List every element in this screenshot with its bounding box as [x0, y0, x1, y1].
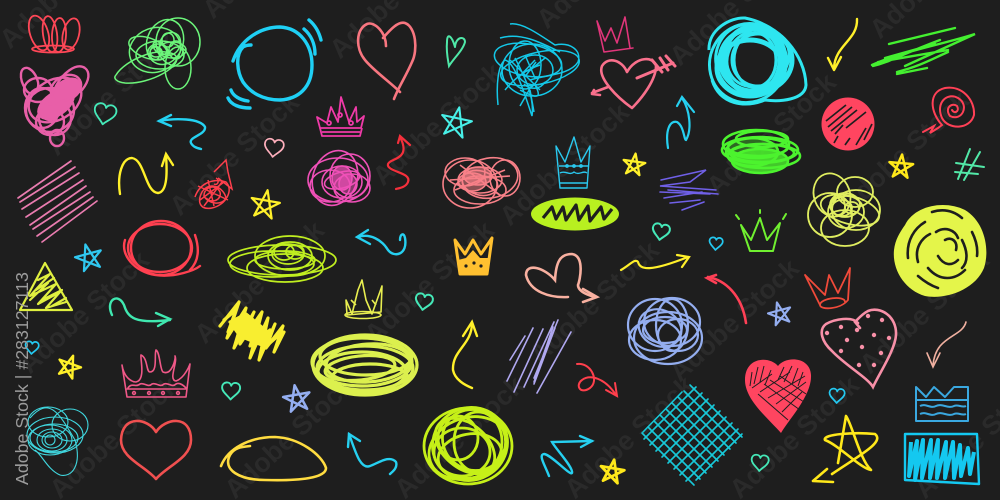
watermark pattern: Adobe Stock	[164, 86, 305, 221]
arrow: blue squiggle	[357, 230, 405, 254]
watermark pattern: Adobe Stock	[14, 244, 155, 379]
lines: lavender slashes	[507, 320, 571, 393]
scribble: cyan large	[695, 9, 806, 117]
arrow: yellow S	[119, 154, 173, 194]
heart: small teal	[92, 102, 118, 127]
crown: blue box	[916, 387, 968, 421]
arrow: yellow right	[621, 255, 689, 270]
side credit text: Adobe Stock | #283127113	[12, 272, 32, 485]
star: yellow small	[622, 152, 646, 176]
scribble: lime flat	[228, 236, 336, 282]
crown: yellow thin	[345, 280, 382, 318]
circle: red scribbled	[124, 221, 200, 276]
lines: purple hatch	[660, 170, 718, 210]
crown: orange	[455, 238, 492, 274]
arrow: blue bottom squiggle	[348, 434, 396, 474]
arrow: yellow down	[828, 19, 857, 70]
star: yellow small left	[55, 352, 84, 380]
scribble: yellow oval ring	[312, 335, 417, 395]
crown: pink outline	[597, 17, 633, 52]
blob: lime oval with zigzag	[531, 198, 619, 230]
heart: small mint center	[414, 293, 434, 311]
star: lavender	[281, 383, 312, 412]
heart: mint	[447, 36, 465, 66]
star: blue left	[73, 241, 105, 272]
watermark pattern: Adobe Stock	[189, 214, 330, 349]
heart: salmon outline	[358, 23, 415, 99]
crown: red loops	[25, 13, 83, 53]
arrow: red squiggle	[388, 136, 410, 189]
watermark pattern: Adobe Stock	[359, 214, 500, 349]
scribble: pink heart	[21, 66, 89, 146]
mesh: teal crosshatch	[642, 385, 742, 485]
arrow: red loop	[577, 364, 617, 396]
star: periwinkle right	[766, 299, 794, 326]
watermark pattern: Adobe Stock	[834, 84, 975, 219]
watermark pattern: Adobe Stock	[701, 66, 842, 201]
watermark pattern: Adobe Stock	[367, 56, 508, 191]
crown: lime	[736, 210, 786, 251]
hash: mint	[955, 149, 984, 180]
arrow: blue curved	[159, 115, 205, 149]
heart: small blue left	[25, 341, 39, 355]
crown: red-orange	[805, 268, 850, 308]
heart: red outline	[121, 421, 191, 479]
crown: magenta	[317, 97, 364, 136]
arrow: teal	[110, 298, 170, 326]
watermark pattern: Adobe Stock	[494, 96, 635, 231]
oval: yellow outline	[221, 437, 326, 480]
lines: pink hatch	[18, 161, 97, 242]
scribble: magenta	[305, 144, 370, 212]
heart: small mint lower	[221, 382, 240, 400]
scribble: blue tangled	[492, 24, 582, 116]
heart: small pale pink	[263, 138, 284, 158]
scribble: salmon	[443, 153, 521, 208]
arrow: blue up	[667, 97, 694, 148]
arrow: peach heart loop	[526, 254, 597, 302]
scribble: green	[115, 14, 200, 89]
scribble: yellow blob	[220, 302, 284, 360]
heart: small blue	[709, 237, 723, 251]
heart: pink dotted	[822, 310, 896, 387]
scribble: cyan thin	[27, 407, 88, 475]
scribble: yellow-green thin	[808, 168, 883, 246]
heart: small mint	[651, 223, 671, 241]
crown: pink scalloped	[122, 350, 190, 397]
watermark pattern: Adobe Stock	[524, 234, 665, 369]
watermark pattern: Adobe Stock	[664, 252, 805, 387]
arrow: red spiral	[923, 88, 974, 133]
crown: blue patterned	[556, 137, 590, 188]
circle: red filled	[822, 98, 874, 150]
star: big yellow with arrow	[813, 416, 877, 482]
arrow: red curve	[707, 275, 746, 323]
heart: red filled hatched	[745, 359, 811, 433]
arrow: blue zig	[542, 436, 592, 476]
arrow: yellow up	[453, 322, 477, 388]
scribble: red with flag	[195, 160, 232, 208]
star: yellow right	[888, 154, 914, 178]
scribble: yellow big	[894, 205, 986, 297]
watermark pattern: Adobe Stock	[41, 26, 182, 161]
heart: small blue right	[829, 388, 845, 403]
lines: green slashes	[872, 28, 975, 74]
star: cyan	[438, 104, 474, 139]
scribble: periwinkle	[628, 298, 702, 364]
scribble: lime ring	[419, 394, 521, 494]
arrow: peach down	[927, 322, 966, 367]
scribble: green oval	[722, 130, 800, 173]
box: blue scribble	[905, 434, 979, 484]
heart: small mint right	[751, 454, 769, 472]
star: yellow bottom	[599, 458, 626, 484]
circle: blue with accents	[228, 20, 321, 108]
star: yellow	[249, 188, 282, 219]
triangle: yellow hatched	[20, 263, 72, 310]
heart: pierced by arrow	[592, 56, 675, 108]
watermark pattern: Adobe Stock	[854, 244, 995, 379]
